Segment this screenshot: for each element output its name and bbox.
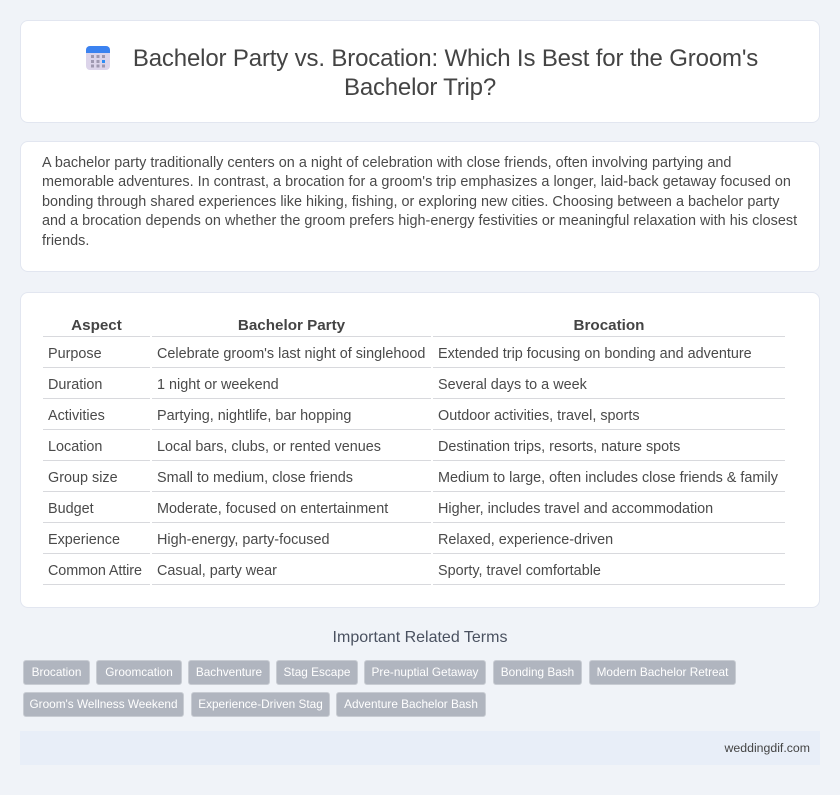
comparison table [43,317,785,585]
title: Bachelor Trip? [344,74,496,101]
comparison table: Extended trip focusing on bonding and adventure [438,346,752,362]
comparison table: Higher, includes travel and accommodation [438,501,713,517]
related term tags: Brocation [32,665,81,679]
comparison table: Duration [48,377,102,393]
text block: introduction: friends. [42,233,89,249]
related term tags: Modern Bachelor Retreat [597,665,728,679]
related term tags: Adventure Bachelor Bash [344,697,478,711]
comparison table: Moderate, focused on entertainment [157,501,388,517]
related term tags: Bonding Bash [501,665,574,679]
text block: introduction: A bachelor party traditionally centers on a night of celebration with close friends, often involving partying and [42,155,731,171]
comparison table: Casual, party wear [157,563,277,579]
text block: introduction: and a brocation depends on whether the groom prefers high-energy festivities or meaningful relaxation with his closest [42,213,797,229]
comparison table: Experience [48,532,120,548]
footer bar [20,731,820,765]
related term tags: Groomcation [105,665,173,679]
text block: introduction [42,155,798,249]
table header: Brocation [574,317,644,334]
comparison table: Celebrate groom's last night of singlehood [157,346,425,362]
comparison table: Destination trips, resorts, nature spots [438,439,680,455]
panel: title card [20,20,820,123]
related term tags: Stag Escape [284,665,350,679]
text block: introduction: memorable adventures. In contrast, a brocation for a groom's trip emphasizes a longer, laid-back getaway focused on [42,174,791,190]
table header: Bachelor Party [238,317,345,334]
comparison table: Local bars, clubs, or rented venues [157,439,381,455]
footer source text: weddingdif.com [725,741,810,755]
related term tags: Bachventure [196,665,262,679]
panel: comparison table card [20,292,820,608]
comparison table: Outdoor activities, travel, sports [438,408,640,424]
comparison table: Budget [48,501,94,517]
comparison table: Partying, nightlife, bar hopping [157,408,351,424]
comparison table: Purpose [48,346,102,362]
comparison table: 1 night or weekend [157,377,279,393]
comparison table: Sporty, travel comfortable [438,563,601,579]
table header [71,317,644,334]
comparison table: High-energy, party-focused [157,532,330,548]
comparison table: Location [48,439,102,455]
comparison table: Small to medium, close friends [157,470,353,486]
comparison table: Relaxed, experience-driven [438,532,613,548]
comparison table: Medium to large, often includes close friends & family [438,470,778,486]
title: Bachelor Party vs. Brocation: Which Is Best for the Groom's [133,45,758,72]
related term tags: Pre-nuptial Getaway [372,665,478,679]
comparison table: Group size [48,470,118,486]
comparison table: Several days to a week [438,377,587,393]
icon: calendar [86,46,110,70]
related term tags: Experience-Driven Stag [198,697,323,711]
related term tags: Groom's Wellness Weekend [29,697,178,711]
heading: related terms: Important Related Terms [333,629,507,646]
title [133,45,758,101]
text block: introduction: bonding through shared experiences like hiking, fishing, or exploring new cities. Choosing between a bachelor party [42,194,779,210]
table header: Aspect [71,317,122,334]
comparison table: Common Attire [48,563,142,579]
related term tags [23,660,736,717]
comparison table: Activities [48,408,105,424]
panel: introduction card [20,141,820,272]
